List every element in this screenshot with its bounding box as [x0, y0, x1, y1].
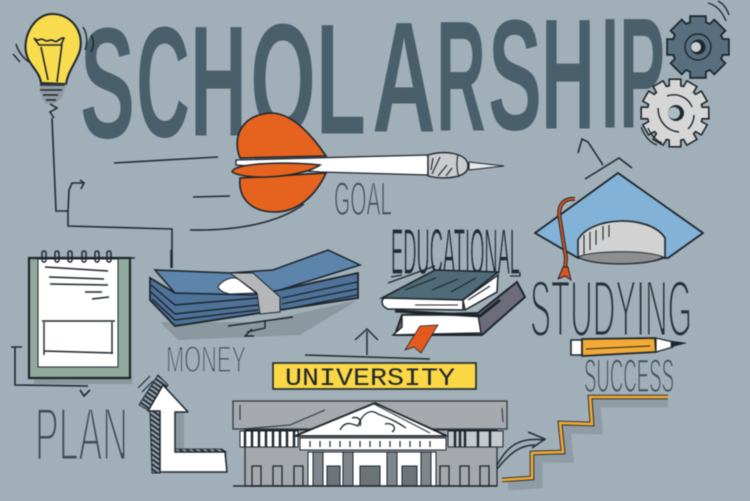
icon: books [382, 266, 525, 353]
label: MONEY: MONEY [166, 339, 246, 380]
icon: university banner [273, 329, 476, 393]
title: SCHOLARSHIP [80, 0, 665, 172]
connector: bulb to money [52, 118, 172, 268]
icon: dart [114, 113, 504, 230]
arrow: building to stairs [497, 432, 545, 469]
label: EDUCATIONAL [391, 215, 520, 288]
icon: university building [233, 401, 507, 486]
text: PLAN [35, 392, 128, 476]
arrow: white up arrow [138, 375, 227, 473]
icon: dark gear [668, 1, 729, 77]
icon: money stack [150, 250, 360, 340]
icon: light bulb [13, 14, 93, 118]
stair success path [502, 397, 668, 486]
icon: notebook [11, 251, 135, 396]
icon: light gear [641, 80, 708, 146]
icon: university banner: UNIVERSITY [285, 364, 455, 393]
icon: graduation cap [535, 139, 703, 280]
text: GOAL [334, 172, 392, 225]
icon: pencil [571, 338, 686, 356]
